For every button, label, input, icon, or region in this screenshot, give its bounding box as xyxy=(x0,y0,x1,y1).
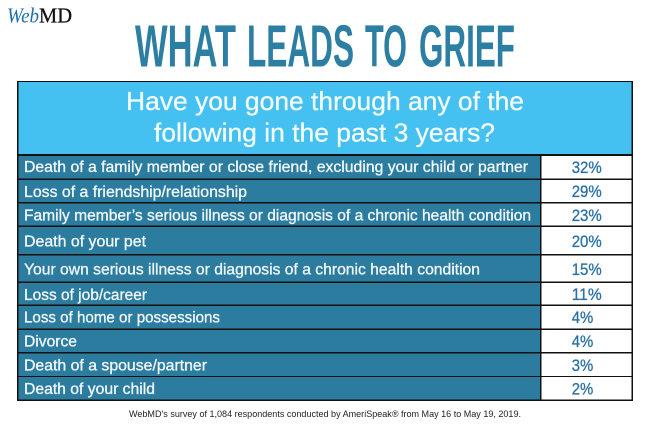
title: GRIEF xyxy=(419,14,515,80)
row: divorce, 4% xyxy=(18,330,632,352)
row: death of child, 2%: Death of your child xyxy=(24,381,155,398)
title: TO xyxy=(365,14,407,80)
row: family member illness, 23% xyxy=(18,204,632,226)
table frame xyxy=(17,81,633,401)
row: death of child, 2%: 2% xyxy=(572,380,593,398)
row: divorce, 4%: Divorce xyxy=(24,334,77,351)
title: LEADS xyxy=(247,14,354,80)
row: death of pet, 20%: 20% xyxy=(572,233,602,251)
row: death of spouse, 3%: Death of a spouse/partner xyxy=(24,358,207,375)
logo: WebMD: MD xyxy=(39,4,72,28)
row: loss of friendship, 29% xyxy=(18,180,632,202)
logo: WebMD xyxy=(7,4,72,28)
title: WHAT xyxy=(135,14,236,80)
row: death of family member or friend, 32%: Death of a family member or close friend, excluding your child or partner xyxy=(24,159,528,176)
row: own illness, 15%: 15% xyxy=(572,261,602,279)
panel: survey table xyxy=(17,81,633,401)
title xyxy=(135,14,515,80)
row: death of family member or friend, 32% xyxy=(18,156,632,178)
row: loss of job, 11% xyxy=(18,283,632,304)
panel: question header: following in the past 3 years? xyxy=(154,118,495,148)
row: loss of home, 4%: Loss of home or possessions xyxy=(24,309,220,326)
row: loss of job, 11%: Loss of job/career xyxy=(24,287,147,304)
row: death of spouse, 3%: 3% xyxy=(572,357,593,375)
row: loss of home, 4% xyxy=(18,306,632,328)
row: own illness, 15%: Your own serious illness or diagnosis of a chronic health condition xyxy=(24,261,480,278)
row: family member illness, 23%: 23% xyxy=(572,207,602,225)
row: own illness, 15% xyxy=(18,256,632,282)
row: death of family member or friend, 32%: 32% xyxy=(572,159,602,177)
row: loss of job, 11%: 11% xyxy=(572,286,602,304)
row: family member illness, 23%: Family member’s serious illness or diagnosis of a chronic health condition xyxy=(24,208,531,225)
row: death of pet, 20% xyxy=(18,227,632,254)
row: death of spouse, 3% xyxy=(18,354,632,376)
row: loss of friendship, 29%: 29% xyxy=(572,183,602,201)
panel: question header xyxy=(18,82,632,154)
panel: question header: Have you gone through any of the xyxy=(126,86,524,116)
row: divorce, 4%: 4% xyxy=(572,333,593,351)
row: loss of home, 4%: 4% xyxy=(572,309,593,327)
logo: WebMD: Web xyxy=(7,4,39,28)
row: death of pet, 20%: Death of your pet xyxy=(24,234,147,251)
footnote: WebMD’s survey of 1,084 respondents conducted by AmeriSpeak® from May 16 to May 19, 2019. xyxy=(129,409,521,420)
row: death of child, 2% xyxy=(18,377,632,400)
row: loss of friendship, 29%: Loss of a friendship/relationship xyxy=(24,184,247,201)
